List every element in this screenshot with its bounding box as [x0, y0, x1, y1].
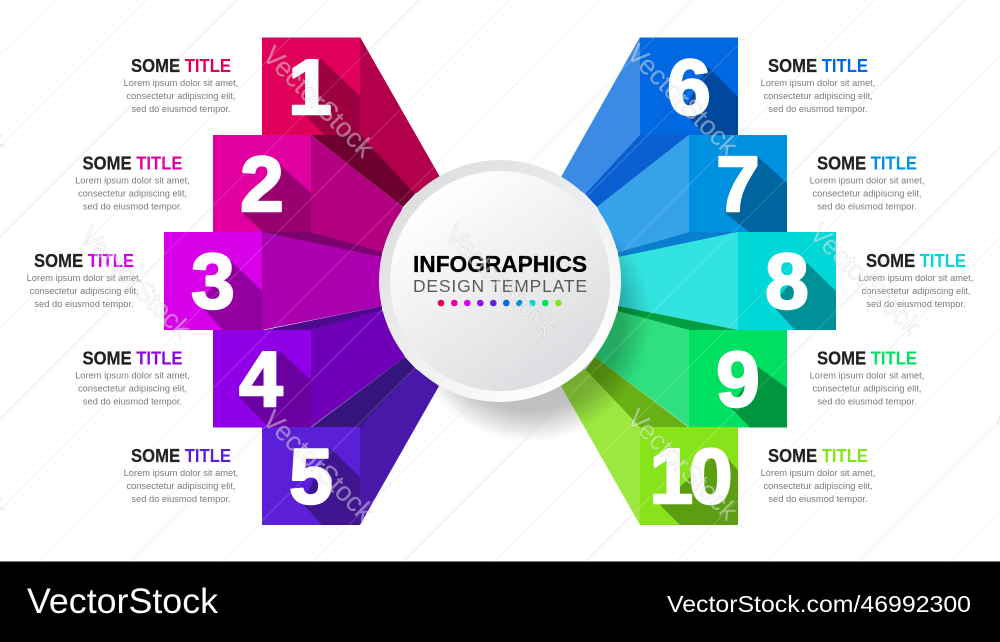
step 8 side panel [618, 232, 738, 330]
step 8 number shadow [772, 263, 836, 330]
step 8 number tile [738, 232, 836, 330]
step 6 heading: SOME TITLE [768, 56, 868, 76]
step 1 description: Lorem ipsum dolor sit amet, [124, 78, 238, 88]
colour dots [438, 300, 562, 306]
step 6 number tile [640, 38, 738, 136]
step 8 description [859, 273, 973, 309]
step 3 description: consectetur adipiscing elit, [29, 286, 139, 296]
step 9 heading: SOME TITLE [817, 348, 917, 368]
step 4 number tile [213, 330, 311, 428]
step 9 number tile [689, 330, 787, 428]
step 9 description: sed do eiusmod tempor. [817, 396, 917, 406]
step 8 heading: SOME TITLE [866, 251, 966, 271]
step 8 dark strip [618, 232, 738, 258]
step 10 number: 10 [650, 432, 730, 520]
footer band [0, 562, 1000, 642]
step 9 description [810, 370, 924, 406]
watermark: VectorStock [257, 404, 380, 528]
watermark: VectorStock [621, 38, 744, 162]
step 9 side panel [595, 311, 689, 427]
subtitle: DESIGN TEMPLATE [413, 276, 587, 296]
step 7 description [810, 176, 924, 212]
step 10 description: consectetur adipiscing elit, [763, 481, 873, 491]
main title: INFOGRAPHICS [413, 251, 587, 277]
step 1 description [124, 78, 238, 114]
step 5 description [124, 468, 238, 504]
step 7 dark strip [585, 135, 689, 207]
step 1 side panel [340, 37, 440, 194]
step 10 heading: SOME TITLE [768, 446, 868, 466]
step 4 description [75, 370, 190, 406]
watermark: VectorStock [74, 221, 197, 345]
step 2 description [75, 176, 190, 212]
step 4 number shadow [239, 351, 311, 428]
step 6 description: consectetur adipiscing elit, [763, 91, 873, 101]
circle inner disc [390, 171, 610, 391]
step 2 [75, 135, 415, 253]
step 5 [124, 357, 439, 525]
step 8 description: Lorem ipsum dolor sit amet, [859, 273, 973, 283]
step 3 side panel [262, 232, 382, 330]
step 2 number shadow [242, 163, 311, 232]
step 6 number: 6 [667, 43, 711, 131]
circle outer ring [379, 160, 621, 402]
step 2 side panel [311, 135, 403, 253]
step 4 description: sed do eiusmod tempor. [83, 396, 182, 406]
footer image id: VectorStock.com/46992300 [667, 591, 971, 617]
step 1 heading: SOME TITLE [131, 56, 231, 76]
step 4 dark strip [265, 306, 382, 330]
step 2 number tile [213, 135, 311, 232]
step 5 side panel [360, 368, 439, 525]
step 7 description: sed do eiusmod tempor. [817, 202, 917, 212]
step 6 description: sed do eiusmod tempor. [768, 104, 868, 114]
step 1 description: sed do eiusmod tempor. [131, 104, 231, 114]
step 1 number tile [262, 38, 360, 136]
step 5 number tile [262, 427, 360, 525]
step 8 description: consectetur adipiscing elit, [861, 286, 971, 296]
step 7 number tile [689, 135, 787, 232]
circle drop shadow [408, 198, 652, 442]
watermark: VectorStock [621, 403, 744, 527]
step 6 number shadow [683, 67, 738, 136]
step 10 description: Lorem ipsum dolor sit amet, [761, 468, 875, 478]
step 3 [27, 232, 382, 330]
step 9 number: 9 [716, 335, 760, 423]
step 5 description: sed do eiusmod tempor. [131, 494, 231, 504]
step 10 number shadow [660, 450, 738, 525]
step 5 heading: SOME TITLE [131, 446, 231, 466]
step 4 description: Lorem ipsum dolor sit amet, [75, 370, 190, 380]
step 7 number shadow [725, 156, 787, 232]
step 9 description: consectetur adipiscing elit, [812, 384, 922, 394]
step 6 side panel [561, 37, 640, 194]
watermark: VectorStock [439, 219, 562, 343]
step 1 number: 1 [288, 43, 332, 131]
step 1 [124, 37, 440, 194]
step 4 [75, 306, 405, 428]
step 7 side panel [597, 135, 689, 252]
step 4 number: 4 [239, 335, 283, 423]
step 9 [595, 306, 924, 428]
step 6 description: Lorem ipsum dolor sit amet, [761, 78, 875, 88]
step 10 dark strip [585, 357, 689, 428]
step 9 number shadow [730, 367, 787, 428]
step 3 description [27, 273, 141, 309]
step 2 description: consectetur adipiscing elit, [78, 188, 187, 198]
step 8 number: 8 [765, 237, 809, 325]
step 3 number: 3 [191, 237, 235, 325]
step 8 description: sed do eiusmod tempor. [866, 299, 966, 309]
step 3 number tile [164, 232, 262, 330]
step 2 description: Lorem ipsum dolor sit amet, [75, 176, 190, 186]
watermark: VectorStock [804, 218, 927, 342]
step 7 heading: SOME TITLE [817, 154, 917, 174]
step 7 [585, 135, 924, 252]
step 5 number shadow [302, 448, 360, 525]
central circle [379, 160, 621, 402]
step 7 description: consectetur adipiscing elit, [812, 188, 922, 198]
step 4 side panel [311, 310, 405, 427]
watermark: VectorStock [257, 40, 380, 164]
step 1 description: consectetur adipiscing elit, [126, 91, 236, 101]
footer brand: VectorStock [27, 582, 219, 621]
step 3 number shadow [200, 260, 262, 330]
step 10 number tile [640, 427, 738, 525]
step 8 [618, 232, 973, 330]
step 2 dark strip [311, 135, 415, 207]
step 2 heading: SOME TITLE [82, 154, 182, 174]
step 5 description: consectetur adipiscing elit, [126, 481, 236, 491]
step 9 dark strip [618, 306, 738, 330]
step 3 dark strip [262, 232, 382, 258]
step 10 side panel [561, 369, 640, 525]
step 7 number: 7 [716, 140, 760, 228]
step 5 dark strip [311, 357, 416, 428]
step 2 description: sed do eiusmod tempor. [83, 202, 182, 212]
step 7 description: Lorem ipsum dolor sit amet, [810, 176, 924, 186]
step 10 description [761, 468, 875, 504]
step 4 description: consectetur adipiscing elit, [78, 384, 187, 394]
step 10 description: sed do eiusmod tempor. [768, 494, 868, 504]
step 5 description: Lorem ipsum dolor sit amet, [124, 468, 238, 478]
step 3 heading: SOME TITLE [34, 251, 134, 271]
step 9 description: Lorem ipsum dolor sit amet, [810, 370, 924, 380]
step 6 [561, 37, 875, 194]
step 10 [561, 357, 875, 525]
step 3 description: Lorem ipsum dolor sit amet, [27, 273, 141, 283]
step 2 number: 2 [240, 140, 284, 228]
step 5 number: 5 [289, 432, 333, 520]
watermark [0, 38, 1000, 528]
step 4 heading: SOME TITLE [82, 348, 182, 368]
step 1 number shadow [305, 58, 360, 136]
step 3 description: sed do eiusmod tempor. [34, 299, 134, 309]
step 6 description [761, 78, 875, 114]
